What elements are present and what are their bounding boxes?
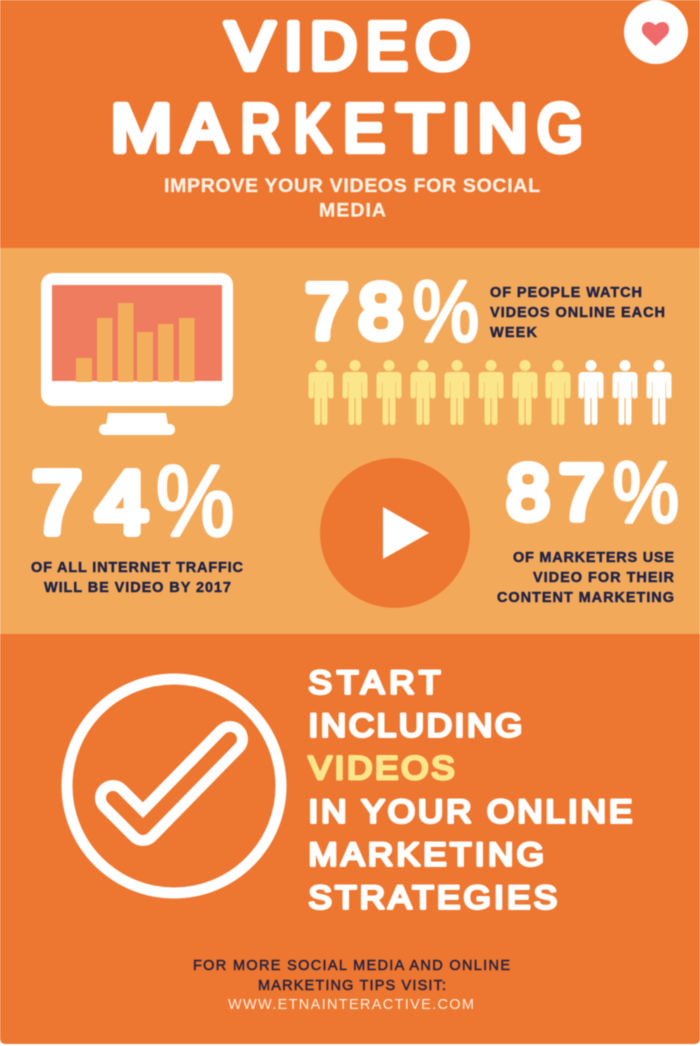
text: footer: FOR MORE SOCIAL MEDIA AND ONLINE bbox=[193, 958, 510, 974]
text: 74% description: WILL BE VIDEO BY 2017 bbox=[44, 580, 231, 596]
text: footer: MARKETING TIPS VISIT: bbox=[258, 978, 446, 994]
stat: 87%: % bbox=[612, 445, 679, 541]
text: 87% description bbox=[497, 550, 675, 606]
text: footer bbox=[193, 958, 510, 1013]
text: call to action bbox=[308, 666, 632, 916]
text: call to action: VIDEOS bbox=[308, 751, 455, 787]
panel: call to action bbox=[0, 634, 700, 1044]
stat: 74%: 7 bbox=[32, 453, 82, 551]
text: call to action: STRATEGIES bbox=[308, 881, 557, 916]
stat: 74% bbox=[32, 445, 234, 557]
title: A bbox=[182, 91, 228, 166]
panel: statistics bbox=[0, 248, 700, 634]
icon: check mark in circle bbox=[67, 679, 281, 893]
title: E bbox=[366, 8, 408, 83]
title: E bbox=[343, 90, 385, 165]
subtitle: MEDIA bbox=[319, 200, 386, 222]
text: 87% description: CONTENT MARKETING bbox=[497, 590, 674, 606]
panel: header bbox=[0, 0, 700, 248]
text: 87% description: OF MARKETERS USE bbox=[513, 550, 674, 566]
icon: heart badge bbox=[624, 0, 688, 64]
subtitle: IMPROVE YOUR VIDEOS FOR SOCIAL bbox=[164, 175, 540, 197]
stat: 74%: 4 bbox=[96, 454, 148, 551]
stat: 87% bbox=[507, 445, 679, 541]
title: D bbox=[310, 8, 357, 83]
text: 78% description: VIDEOS ONLINE EACH bbox=[490, 305, 665, 321]
text: 74% description: OF ALL INTERNET TRAFFIC bbox=[31, 560, 244, 576]
pictogram: people 8 of 11 highlighted bbox=[308, 360, 672, 425]
text: 78% description: OF PEOPLE WATCH bbox=[490, 285, 642, 301]
stat: 78%: 7 bbox=[305, 269, 348, 355]
icon: monitor with bar chart bbox=[41, 273, 233, 435]
stat: 78% bbox=[305, 264, 479, 360]
title bbox=[111, 8, 583, 166]
icon: play button bbox=[320, 458, 470, 608]
text: 74% description bbox=[31, 560, 244, 596]
text: 87% description: VIDEO FOR THEIR bbox=[533, 570, 675, 586]
title: G bbox=[537, 91, 583, 166]
title: K bbox=[294, 91, 331, 166]
stat: 87%: 7 bbox=[559, 449, 604, 536]
stat: 74%: % bbox=[156, 445, 234, 557]
title: I bbox=[284, 9, 303, 84]
stat: 78%: % bbox=[412, 264, 479, 360]
text: 78% description bbox=[490, 285, 665, 341]
title: I bbox=[452, 91, 470, 166]
stat: 78%: 8 bbox=[359, 268, 403, 355]
subtitle bbox=[164, 175, 540, 222]
text: footer: WWW.ETNAINTERACTIVE.COM bbox=[228, 997, 474, 1013]
text: call to action: MARKETING bbox=[308, 838, 544, 873]
title: R bbox=[241, 91, 280, 165]
stat: 87%: 8 bbox=[507, 450, 550, 536]
title: N bbox=[478, 91, 527, 166]
title: T bbox=[397, 91, 443, 166]
title: O bbox=[416, 9, 470, 84]
text: call to action: START bbox=[308, 666, 440, 701]
text: 78% description: WEEK bbox=[490, 325, 538, 341]
title: M bbox=[111, 90, 172, 165]
text: call to action: INCLUDING bbox=[308, 709, 522, 744]
title: V bbox=[226, 9, 275, 83]
text: call to action: IN YOUR ONLINE bbox=[308, 795, 632, 830]
bar chart bbox=[76, 303, 194, 382]
